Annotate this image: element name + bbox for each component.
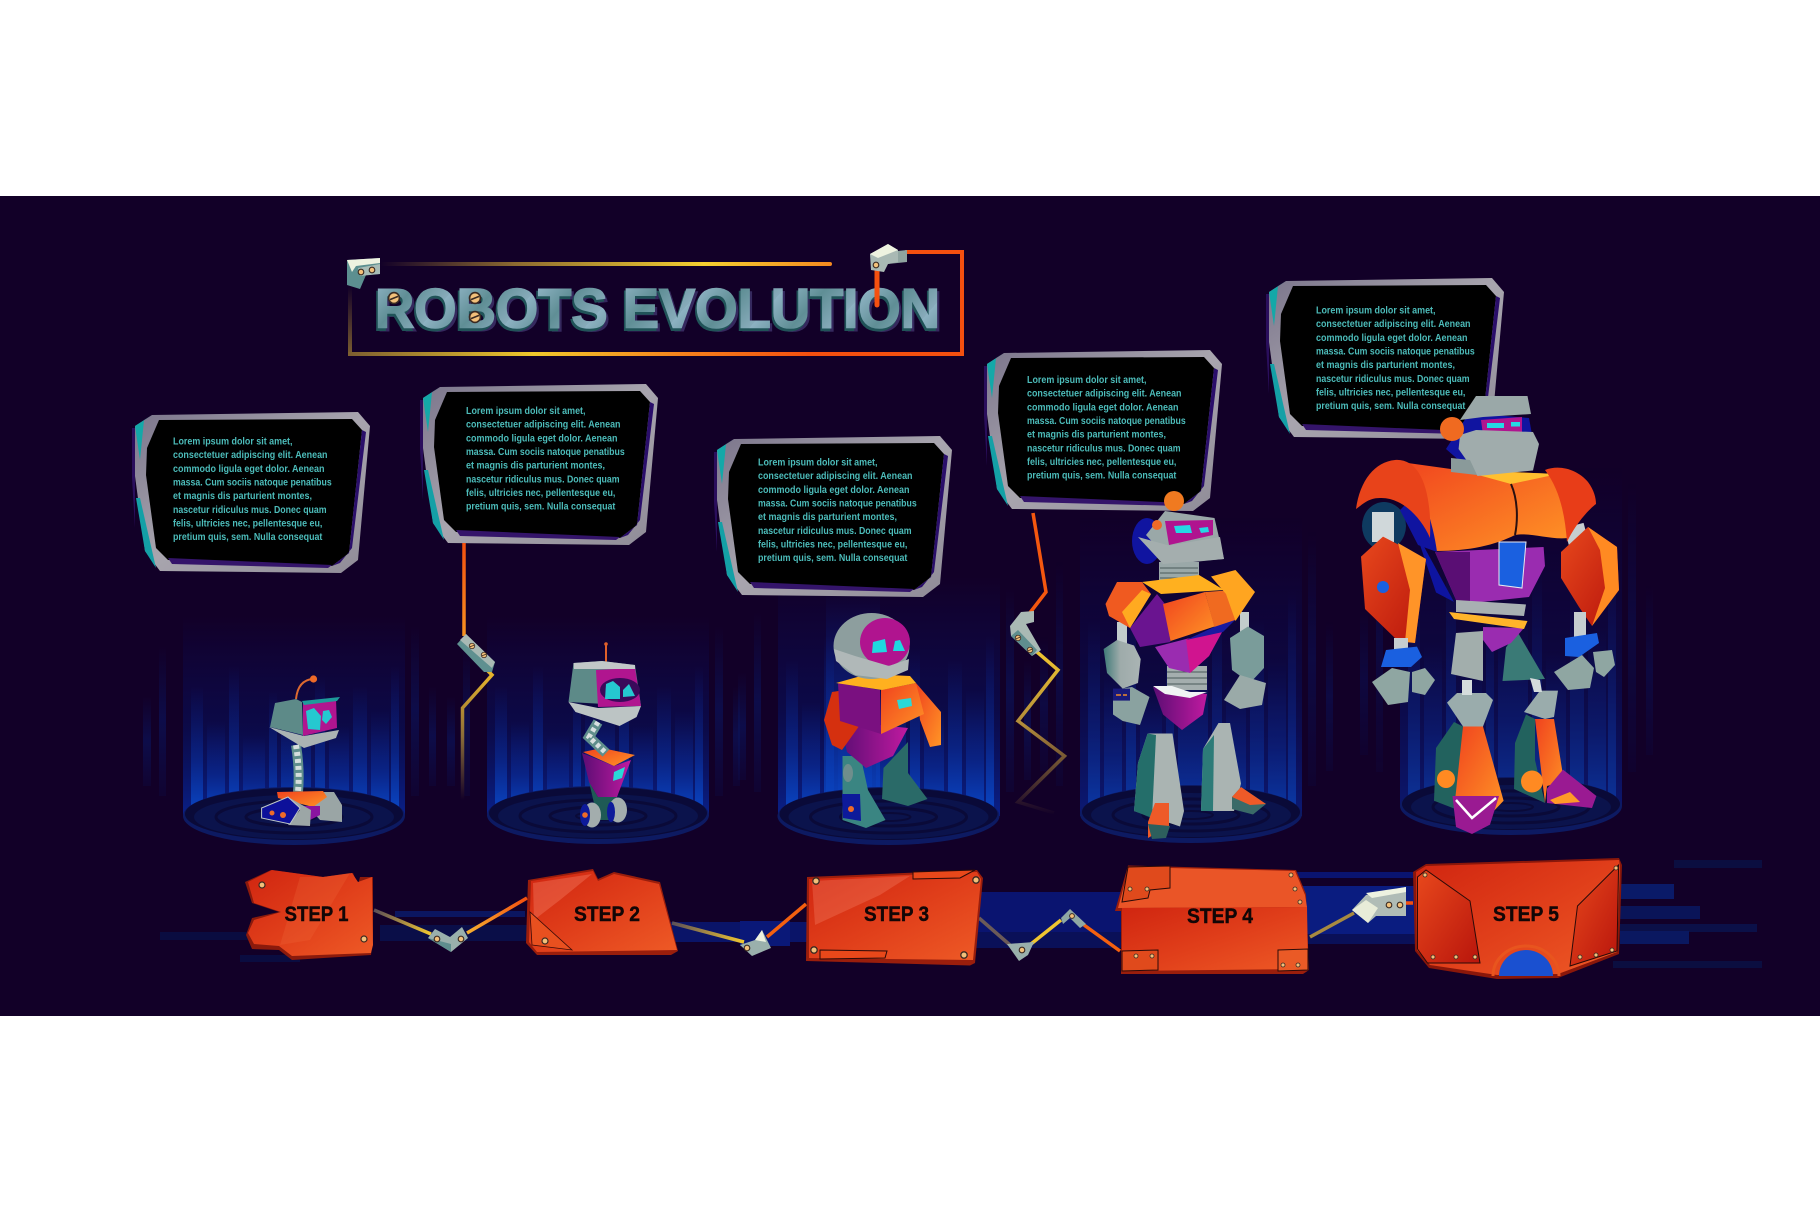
robot 1 — [262, 675, 342, 826]
step 5: STEP 5 — [1493, 903, 1559, 926]
step 1 — [245, 870, 373, 960]
thighs — [1451, 631, 1545, 695]
panel 2 text: massa. Cum sociis natoque penatibus — [466, 446, 625, 458]
panel 4 text: consectetuer adipiscing elit. Aenean — [1027, 388, 1182, 400]
title: ROBOTS EVOLUTION — [374, 279, 938, 342]
pelvis — [1483, 627, 1524, 652]
torso armour — [1393, 461, 1568, 552]
dark background band — [0, 196, 1820, 1016]
panel 1 text: nascetur ridiculus mus. Donec quam — [173, 504, 327, 516]
glow curtain: robot 2 — [447, 616, 740, 816]
panel 1 text: massa. Cum sociis natoque penatibus — [173, 476, 332, 488]
neck — [296, 745, 299, 792]
horizontal blue light bars behind steps — [160, 860, 1762, 968]
left leg — [1434, 693, 1504, 834]
panel 1 text: consectetuer adipiscing elit. Aenean — [173, 449, 328, 461]
panel 5 text: commodo ligula eget dolor. Aenean — [1316, 332, 1468, 344]
wire: panel 2 to robot 2 — [457, 543, 495, 800]
robot 3 — [824, 613, 941, 828]
connector 4-5 — [1352, 887, 1406, 923]
right leg — [1201, 723, 1266, 814]
step 4 — [1115, 866, 1309, 974]
panel 5 text: massa. Cum sociis natoque penatibus — [1316, 346, 1475, 358]
left shoulder — [1356, 460, 1430, 538]
panel 2 text: et magnis dis parturient montes, — [466, 460, 605, 472]
connector 3-4 a — [1007, 942, 1034, 961]
panel 4 text — [1027, 374, 1186, 482]
platform 1 — [183, 787, 405, 845]
left arm — [1361, 502, 1435, 705]
chest — [1130, 575, 1236, 647]
head — [1132, 491, 1224, 564]
right arm — [1554, 523, 1619, 690]
pelvis — [1153, 687, 1207, 730]
connector 3-4 b — [1061, 909, 1086, 928]
platform 3 — [778, 787, 1000, 845]
left leg — [1134, 734, 1184, 839]
panel 5 text: felis, ultricies nec, pellentesque eu, — [1316, 386, 1465, 398]
platform 2 — [487, 786, 709, 844]
panel 5 text: nascetur ridiculus mus. Donec quam — [1316, 373, 1470, 385]
icon: title left plug — [347, 258, 380, 289]
panel 2 text: commodo ligula eget dolor. Aenean — [466, 432, 618, 444]
panel 3 text: pretium quis, sem. Nulla consequat — [758, 552, 908, 564]
panel 3 text — [758, 456, 917, 564]
step 5 — [1413, 858, 1622, 979]
robot 2 — [568, 642, 641, 828]
panel 5 text: et magnis dis parturient montes, — [1316, 359, 1455, 371]
panel 2 text: Lorem ipsum dolor sit amet, — [466, 405, 586, 417]
step 4: STEP 4 — [1187, 905, 1253, 928]
panel 2 text — [466, 405, 625, 513]
panel 3 text: felis, ultricies nec, pellentesque eu, — [758, 538, 907, 550]
shoulders — [1106, 570, 1255, 628]
panel 2 — [420, 384, 658, 545]
robot 4 — [1104, 491, 1266, 839]
panel 4 text: Lorem ipsum dolor sit amet, — [1027, 374, 1147, 386]
step 2 — [526, 869, 678, 955]
step 3: STEP 3 — [864, 903, 929, 926]
antenna — [296, 675, 317, 699]
panel 4 — [984, 350, 1222, 511]
head — [269, 697, 340, 748]
wire: panel 4 to robot 4 — [1010, 513, 1064, 813]
panel 5 text: consectetuer adipiscing elit. Aenean — [1316, 318, 1470, 330]
panel 3 text: nascetur ridiculus mus. Donec quam — [758, 525, 912, 537]
panel 5 text — [1316, 304, 1475, 412]
panel 4 text: et magnis dis parturient montes, — [1027, 429, 1166, 441]
wires between steps — [374, 898, 1413, 951]
glow curtain: robot 1 — [143, 616, 436, 816]
right arm — [1224, 612, 1266, 709]
panel 3 text: Lorem ipsum dolor sit amet, — [758, 456, 878, 468]
title frame — [348, 252, 964, 356]
panel 1 text: pretium quis, sem. Nulla consequat — [173, 531, 323, 543]
panel 4 text: nascetur ridiculus mus. Donec quam — [1027, 442, 1181, 454]
panel 5 — [1266, 278, 1504, 439]
panel 3 text: et magnis dis parturient montes, — [758, 511, 897, 523]
step 3 — [806, 870, 983, 966]
panel 3 text: commodo ligula eget dolor. Aenean — [758, 484, 910, 496]
panel 1 — [132, 412, 370, 573]
tracks — [262, 791, 342, 826]
panel 1 text: Lorem ipsum dolor sit amet, — [173, 436, 293, 448]
panel 2 text: pretium quis, sem. Nulla consequat — [466, 501, 616, 513]
panel 3 text: consectetuer adipiscing elit. Aenean — [758, 470, 912, 482]
title: ROBOTS EVOLUTION — [375, 276, 940, 340]
left arm — [1104, 622, 1150, 725]
panel 1 text: commodo ligula eget dolor. Aenean — [173, 463, 324, 475]
panel 5 text: pretium quis, sem. Nulla consequat — [1316, 400, 1466, 412]
panel 3 — [714, 436, 952, 597]
glow curtain: robot 3 — [738, 576, 1031, 816]
panel 5 text: Lorem ipsum dolor sit amet, — [1316, 304, 1436, 316]
glow curtain: robot 4 — [1040, 516, 1333, 816]
panel 2 text: consectetuer adipiscing elit. Aenean — [466, 419, 620, 431]
platform 4 — [1080, 785, 1302, 843]
panel 2 text: nascetur ridiculus mus. Donec quam — [466, 473, 620, 485]
panel 1 text — [173, 436, 332, 543]
robot 5 — [1356, 396, 1619, 834]
connector 1-2 — [428, 927, 468, 952]
platform 5 — [1400, 777, 1622, 835]
title: ROBOTS EVOLUTION — [377, 280, 942, 342]
abdomen — [1155, 632, 1222, 673]
panel 2 text: felis, ultricies nec, pellentesque eu, — [466, 487, 615, 499]
right shoulder — [1545, 468, 1596, 542]
panel 4 text: commodo ligula eget dolor. Aenean — [1027, 401, 1178, 413]
right leg — [1514, 691, 1596, 808]
panel 4 text: felis, ultricies nec, pellentesque eu, — [1027, 456, 1176, 468]
glow curtain: robot 5 — [1360, 466, 1653, 806]
head — [1440, 396, 1539, 476]
step 2: STEP 2 — [574, 903, 640, 926]
panel 3 text: massa. Cum sociis natoque penatibus — [758, 498, 917, 510]
abdomen — [1415, 530, 1545, 629]
panel 4 text: pretium quis, sem. Nulla consequat — [1027, 470, 1177, 482]
icon: title right plug — [870, 244, 907, 272]
panel 1 text: et magnis dis parturient montes, — [173, 490, 312, 502]
connector 2-3 — [740, 930, 771, 956]
panel 4 text: massa. Cum sociis natoque penatibus — [1027, 415, 1186, 427]
panel 1 text: felis, ultricies nec, pellentesque eu, — [173, 518, 322, 530]
step 1: STEP 1 — [284, 903, 349, 926]
waist — [1153, 666, 1207, 698]
neck — [1159, 562, 1199, 582]
